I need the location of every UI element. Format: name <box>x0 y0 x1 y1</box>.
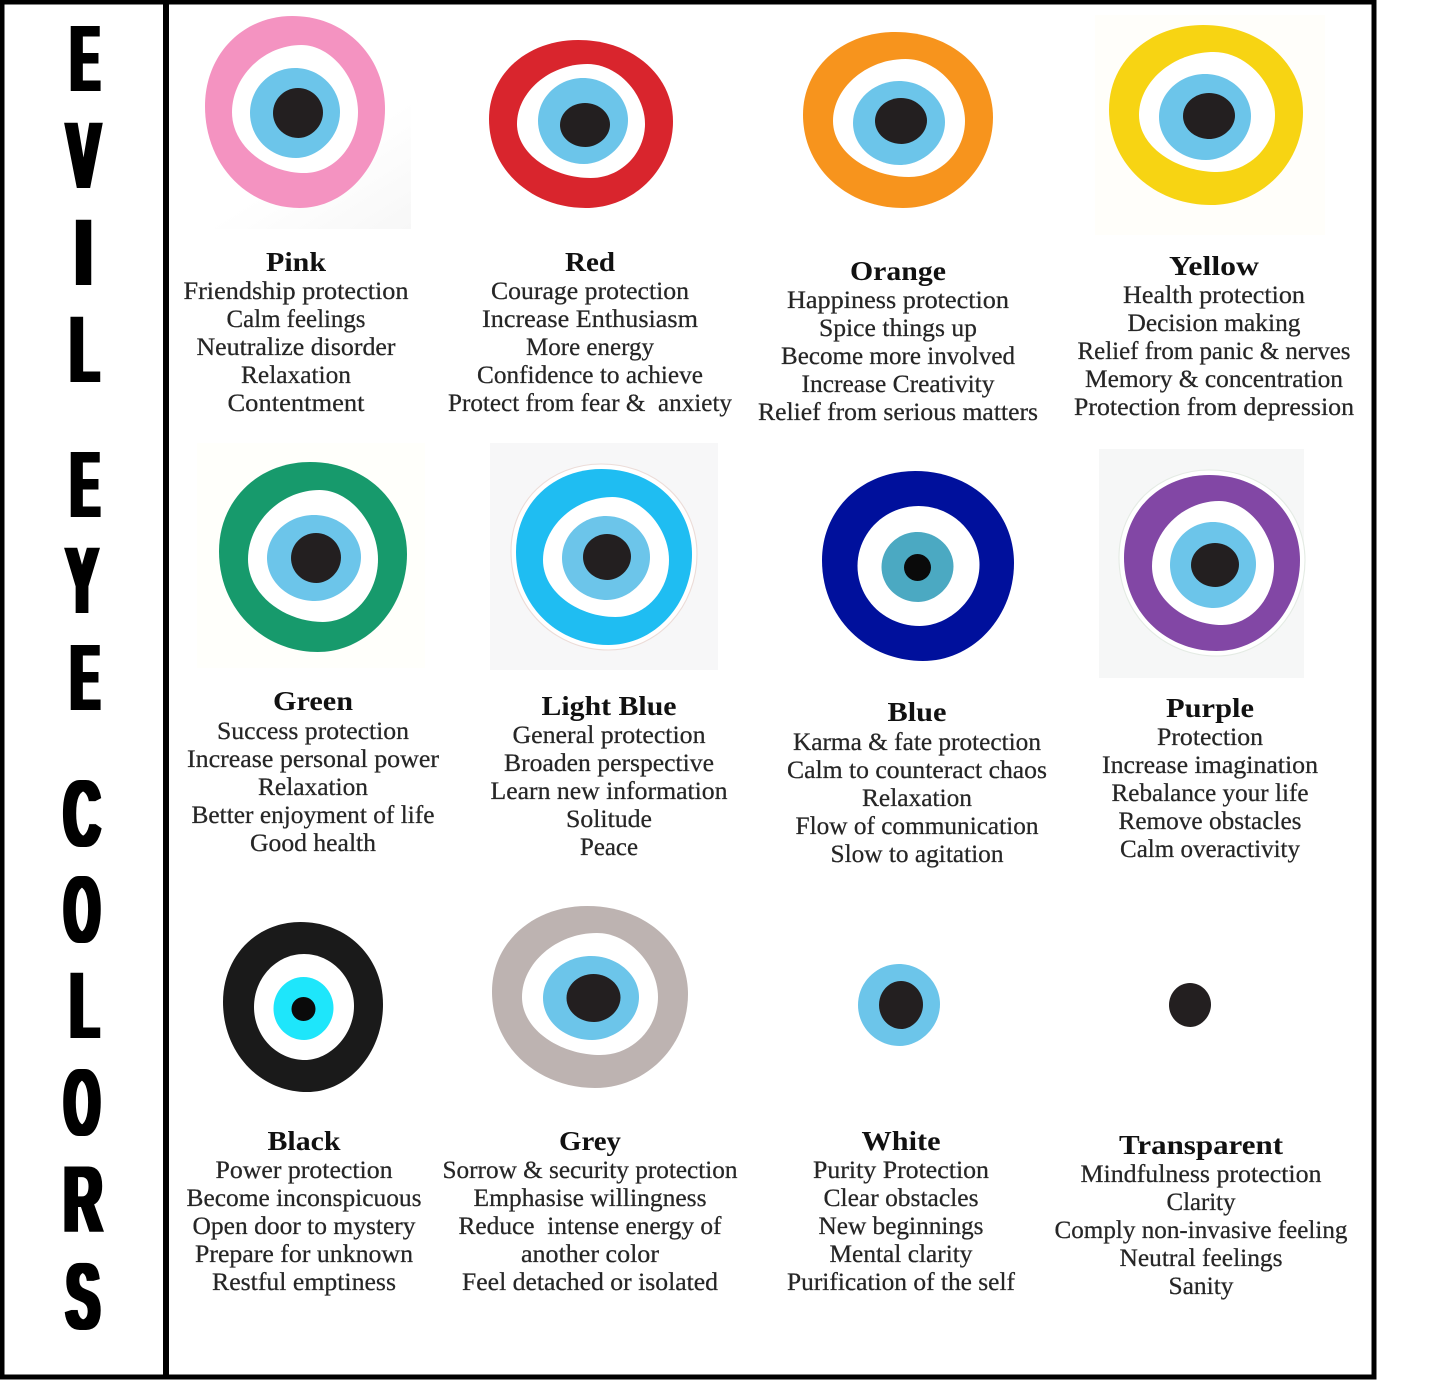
title: EVIL EYE COLORS: E <box>71 432 99 538</box>
title: EVIL EYE COLORS: I <box>74 201 93 306</box>
text: green meanings: Increase personal power <box>187 746 440 773</box>
text: white meanings: White <box>862 1126 941 1156</box>
text: red meanings: Increase Enthusiasm <box>482 306 699 333</box>
icon: white evil eye <box>858 964 940 1046</box>
panel: black <box>186 922 422 1296</box>
text: pink meanings: Calm feelings <box>226 306 366 333</box>
text: purple meanings <box>1102 693 1319 863</box>
text: pink meanings: Contentment <box>228 390 365 417</box>
text: transparent meanings: Mindfulness protection <box>1080 1161 1322 1188</box>
icon: purple evil eye <box>1119 470 1305 656</box>
text: green meanings: Good health <box>250 830 377 857</box>
icon: orange evil eye <box>803 32 993 208</box>
title: EVIL EYE COLORS: E <box>71 625 99 731</box>
text: grey meanings <box>442 1126 738 1296</box>
icon: black evil eye <box>223 922 383 1092</box>
text: white meanings: Purification of the self <box>787 1269 1016 1296</box>
text: light blue meanings: Peace <box>580 834 638 861</box>
panel: white <box>787 964 1016 1296</box>
title: EVIL EYE COLORS: Y <box>66 527 98 633</box>
text: red meanings: Red <box>565 247 615 277</box>
panel: pink <box>184 16 411 417</box>
panel: transparent <box>1054 983 1348 1300</box>
text: grey meanings: Grey <box>559 1126 622 1156</box>
text: orange meanings: Relief from serious matters <box>758 399 1038 426</box>
text: black meanings: Become inconspicuous <box>186 1185 422 1212</box>
text: grey meanings: Emphasise willingness <box>474 1185 706 1212</box>
text: pink meanings: Neutralize disorder <box>196 334 396 361</box>
text: red meanings: More energy <box>526 334 654 361</box>
text: red meanings: Courage protection <box>491 278 689 305</box>
text: transparent meanings: Comply non-invasive feeling <box>1054 1217 1348 1244</box>
icon: red evil eye <box>489 40 673 208</box>
text: yellow meanings: Memory & concentration <box>1085 366 1344 393</box>
text: white meanings <box>787 1126 1016 1296</box>
text: black meanings <box>186 1126 422 1296</box>
text: purple meanings: Protection <box>1157 724 1264 751</box>
text: grey meanings: Reduce intense energy of <box>458 1213 722 1240</box>
text: blue meanings: Blue <box>888 697 947 727</box>
text: light blue meanings: Broaden perspective <box>504 750 714 777</box>
text: purple meanings: Remove obstacles <box>1118 808 1302 835</box>
text: green meanings <box>187 686 440 857</box>
title: EVIL EYE COLORS: C <box>64 762 100 867</box>
panel: light blue <box>490 443 728 861</box>
text: transparent meanings: Sanity <box>1168 1273 1234 1300</box>
text: blue meanings <box>787 697 1047 868</box>
panel: purple <box>1099 449 1319 863</box>
text: orange meanings: Spice things up <box>819 315 977 342</box>
text: black meanings: Prepare for unknown <box>195 1241 414 1268</box>
text: transparent meanings: Clarity <box>1166 1189 1236 1216</box>
text: red meanings: Protect from fear & anxiety <box>448 390 732 417</box>
text: green meanings: Better enjoyment of life <box>192 802 434 829</box>
panel: red <box>448 40 732 417</box>
text: transparent meanings: Transparent <box>1119 1130 1283 1160</box>
text: yellow meanings: Relief from panic & nerves <box>1078 338 1350 365</box>
text: white meanings: Clear obstacles <box>824 1185 978 1212</box>
text: black meanings: Restful emptiness <box>212 1269 396 1296</box>
text: orange meanings <box>758 256 1038 426</box>
text: black meanings: Open door to mystery <box>192 1213 416 1240</box>
text: white meanings: New beginnings <box>818 1213 984 1240</box>
text: white meanings: Mental clarity <box>830 1241 973 1268</box>
icon: grey evil eye <box>492 906 688 1088</box>
text: blue meanings: Slow to agitation <box>830 841 1004 868</box>
text: grey meanings: another color <box>521 1241 660 1268</box>
text: green meanings: Success protection <box>217 718 410 745</box>
text: orange meanings: Orange <box>850 256 946 286</box>
text: red meanings <box>448 247 732 417</box>
text: transparent meanings: Neutral feelings <box>1120 1245 1282 1272</box>
title: EVIL EYE COLORS <box>64 6 102 1350</box>
title: EVIL EYE COLORS: O <box>64 857 100 962</box>
icon: pink evil eye <box>205 16 385 208</box>
text: orange meanings: Happiness protection <box>787 287 1010 314</box>
text: black meanings: Black <box>268 1126 340 1156</box>
title: EVIL EYE COLORS: L <box>70 953 99 1058</box>
text: pink meanings: Relaxation <box>241 362 351 389</box>
title: EVIL EYE COLORS: L <box>70 297 99 402</box>
text: light blue meanings: Light Blue <box>542 691 677 721</box>
text: yellow meanings <box>1074 251 1355 421</box>
text: blue meanings: Flow of communication <box>796 813 1039 840</box>
text: blue meanings: Calm to counteract chaos <box>787 757 1047 784</box>
panel: blue <box>787 471 1047 868</box>
title: EVIL EYE COLORS: O <box>64 1050 100 1155</box>
text: pink meanings: Friendship protection <box>184 278 409 305</box>
icon: transparent evil eye <box>1169 983 1211 1027</box>
text: green meanings: Relaxation <box>258 774 368 801</box>
text: yellow meanings: Yellow <box>1169 251 1260 281</box>
text: grey meanings: Feel detached or isolated <box>462 1269 719 1296</box>
icon: green evil eye <box>219 462 407 652</box>
text: black meanings: Power protection <box>216 1157 393 1184</box>
text: light blue meanings <box>490 691 728 861</box>
text: yellow meanings: Decision making <box>1128 310 1301 337</box>
icon: yellow evil eye <box>1109 25 1303 205</box>
panel: yellow <box>1074 15 1355 421</box>
text: light blue meanings: Learn new information <box>490 778 728 805</box>
icon: light blue evil eye <box>511 464 697 650</box>
title: EVIL EYE COLORS: S <box>66 1245 100 1350</box>
panel: orange <box>758 32 1038 426</box>
text: grey meanings: Sorrow & security protection <box>442 1157 738 1184</box>
text: blue meanings: Relaxation <box>862 785 972 812</box>
text: yellow meanings: Protection from depression <box>1074 394 1355 421</box>
text: light blue meanings: Solitude <box>566 806 652 833</box>
title: EVIL EYE COLORS: V <box>67 104 100 209</box>
text: purple meanings: Purple <box>1166 693 1254 723</box>
text: purple meanings: Calm overactivity <box>1120 836 1300 863</box>
frame: title column divider <box>163 2 169 1377</box>
text: transparent meanings <box>1054 1130 1348 1300</box>
icon: blue evil eye <box>822 471 1014 661</box>
text: green meanings: Green <box>273 686 353 716</box>
title: EVIL EYE COLORS: E <box>71 6 99 112</box>
text: orange meanings: Become more involved <box>781 343 1016 370</box>
text: light blue meanings: General protection <box>512 722 706 749</box>
text: red meanings: Confidence to achieve <box>477 362 703 389</box>
title: EVIL EYE COLORS: R <box>64 1148 102 1253</box>
text: pink meanings: Pink <box>266 247 326 277</box>
text: purple meanings: Increase imagination <box>1102 752 1319 779</box>
text: white meanings: Purity Protection <box>813 1157 990 1184</box>
text: purple meanings: Rebalance your life <box>1112 780 1308 807</box>
text: yellow meanings: Health protection <box>1123 282 1306 309</box>
panel: grey <box>442 906 738 1296</box>
text: orange meanings: Increase Creativity <box>802 371 995 398</box>
panel: green <box>187 443 440 857</box>
text: blue meanings: Karma & fate protection <box>793 729 1041 756</box>
text: pink meanings <box>184 247 409 417</box>
